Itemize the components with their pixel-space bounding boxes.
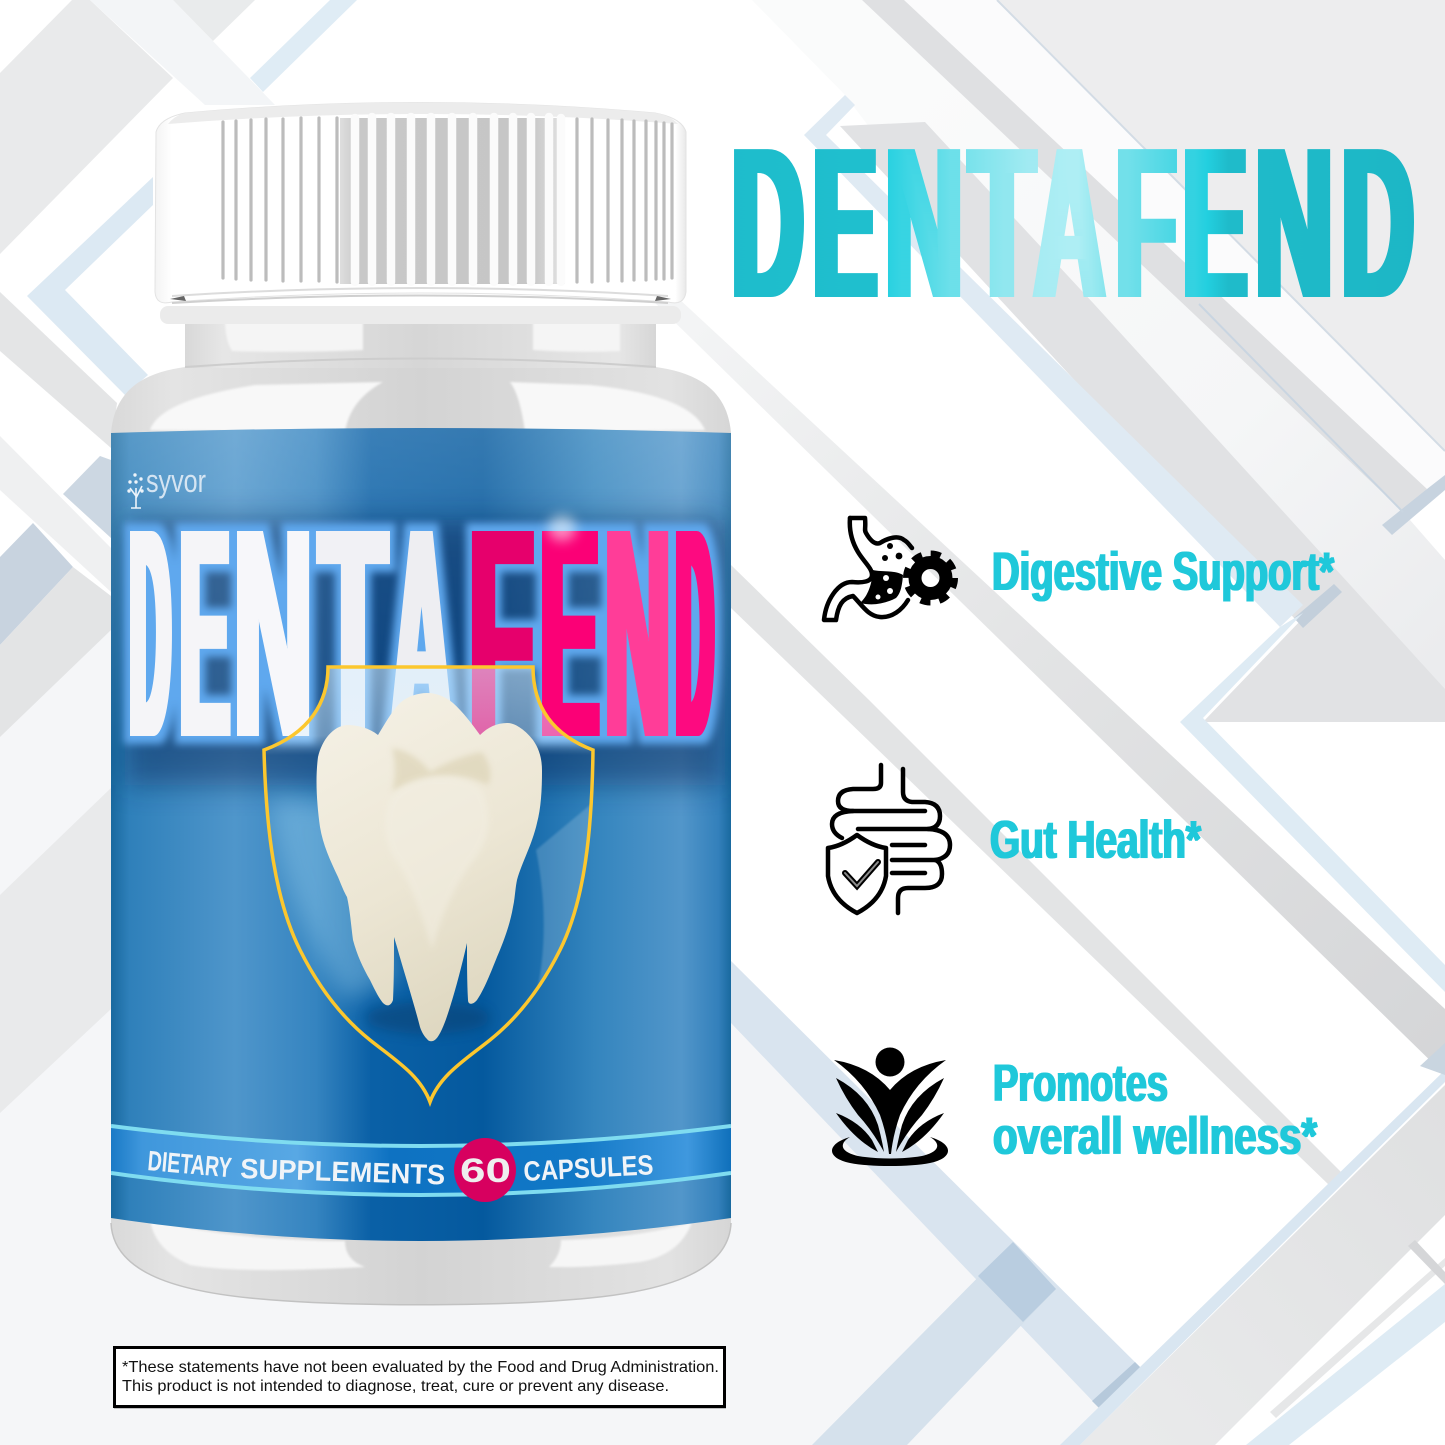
60 badge: 60: [460, 1152, 511, 1190]
label title: DENTAFEND: T: [319, 467, 387, 800]
main title: DENTAFEND: A: [1034, 102, 1104, 343]
neck: [160, 306, 681, 368]
label band text: [146, 1145, 654, 1190]
light flare: [548, 515, 576, 541]
label title: DENTAFEND: A: [391, 467, 452, 800]
main title: DENTAFEND: N: [1255, 102, 1333, 343]
main title: DENTAFEND: F: [1116, 102, 1176, 343]
disclaimer box: This product is not intended to diagnose, treat, cure or prevent any disease.: [122, 1378, 669, 1395]
label band text: SUPPLEMENTS: [240, 1153, 446, 1190]
bottle body: [111, 367, 731, 1305]
label title: DENTAFEND: N: [234, 467, 312, 800]
main title: DENTAFEND: N: [885, 102, 963, 343]
shield: [250, 660, 610, 1102]
icon: wellness figure: [832, 1048, 948, 1166]
label title: DENTAFEND: N: [605, 467, 670, 800]
label title: DENTAFEND: E: [540, 467, 599, 800]
60 badge: [454, 1138, 516, 1202]
main title: DENTAFEND: E: [1183, 102, 1247, 343]
feature text: gut health: Gut Health*: [990, 810, 1201, 870]
brand logo: syvor: [127, 463, 206, 508]
label band text: DIETARY: [146, 1145, 233, 1183]
disclaimer box: [114, 1348, 726, 1409]
icon: intestine with shield: [828, 765, 950, 913]
main title: DENTAFEND: D: [732, 102, 804, 343]
label title: DENTAFEND: E: [180, 467, 230, 800]
label title: DENTAFEND: [130, 467, 713, 800]
text: D: [677, 467, 713, 800]
screw cap: [155, 102, 686, 303]
label band text: CAPSULES: [523, 1149, 654, 1187]
tooth: [317, 693, 542, 1041]
brand logo: syvor: syvor: [146, 463, 206, 499]
product bottle: [111, 102, 731, 1305]
label title: DENTAFEND: D: [130, 467, 170, 800]
feature text: promotes overall wellness: Promotes: [993, 1054, 1168, 1113]
main title: DENTAFEND: [732, 102, 1414, 343]
feature text: promotes overall wellness: overall wellness*: [993, 1107, 1317, 1166]
disclaimer box: *These statements have not been evaluated by the Food and Drug Administration.: [122, 1359, 719, 1376]
bottom band: [111, 1126, 731, 1195]
label title: DENTAFEND: F: [469, 467, 534, 800]
feature text: promotes overall wellness: [993, 1054, 1317, 1166]
main title: DENTAFEND: E: [813, 102, 877, 343]
title shadow panel: [125, 520, 725, 785]
label: [111, 423, 731, 1265]
main title: DENTAFEND: T: [969, 102, 1035, 343]
icon: stomach with gear: [824, 518, 954, 620]
